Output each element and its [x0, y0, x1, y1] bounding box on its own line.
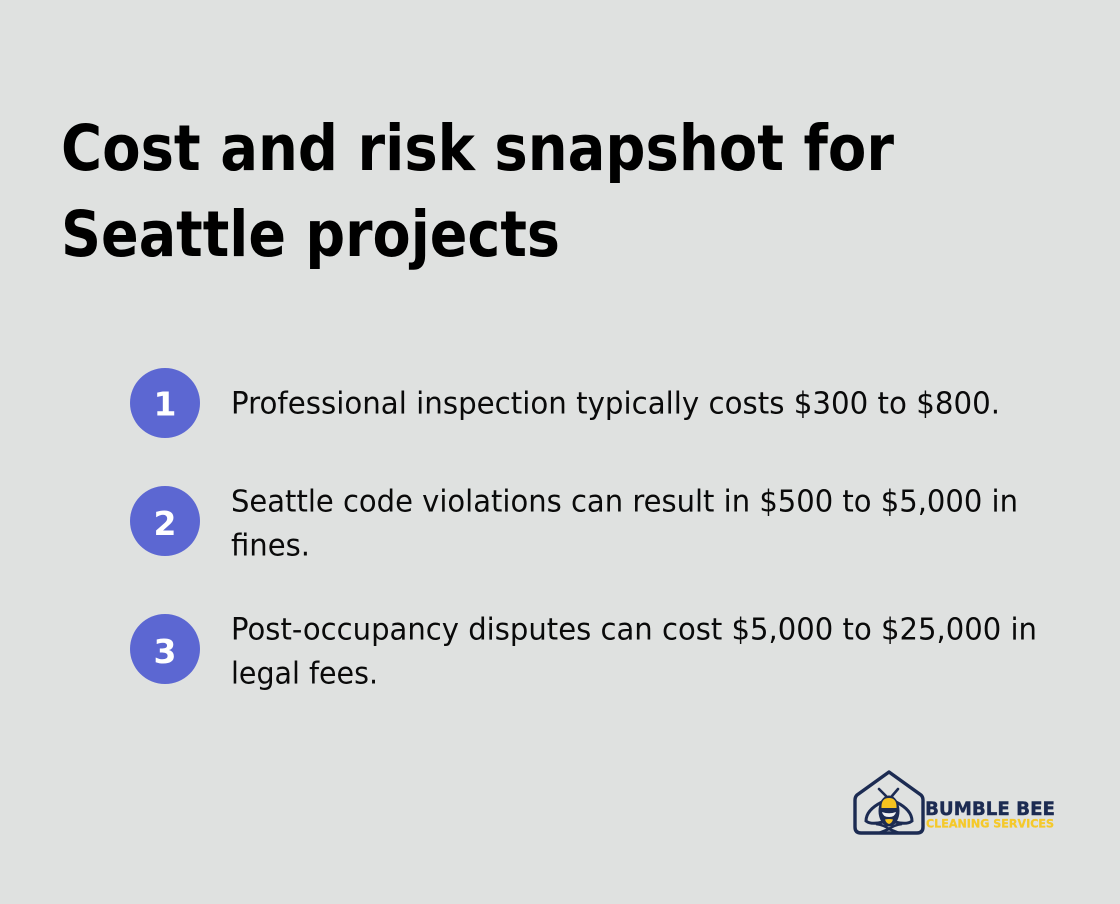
logo wordmark: BUMBLE BEE [925, 798, 1055, 820]
title: Seattle projects [61, 198, 560, 271]
text 3: legal fees. [231, 656, 378, 692]
logo wordmark [925, 798, 1055, 830]
icon: house with bee [855, 772, 923, 833]
text 3: Post-occupancy disputes can cost $5,000 to $25,000 in [231, 612, 1037, 648]
text 2: fines. [231, 528, 310, 564]
badge 1: 1 [154, 384, 176, 424]
badge 2: 2 [154, 504, 176, 543]
text 3 [231, 612, 1037, 692]
title: Cost and risk snapshot for [61, 112, 894, 185]
title [61, 112, 894, 271]
list item 3 [130, 612, 1037, 692]
badge 1 [130, 368, 200, 438]
list item 2 [130, 484, 1018, 564]
text 2 [231, 484, 1018, 564]
badge 2 [130, 486, 200, 556]
badge 3 [130, 614, 200, 684]
list item 1 [130, 368, 1000, 438]
logo: Bumble Bee Cleaning Services [855, 772, 1055, 833]
text 2: Seattle code violations can result in $500 to $5,000 in [231, 484, 1018, 520]
badge 3: 3 [154, 632, 176, 671]
logo wordmark: CLEANING SERVICES [926, 816, 1054, 830]
text 1: Professional inspection typically costs $300 to $800. [231, 386, 1000, 422]
